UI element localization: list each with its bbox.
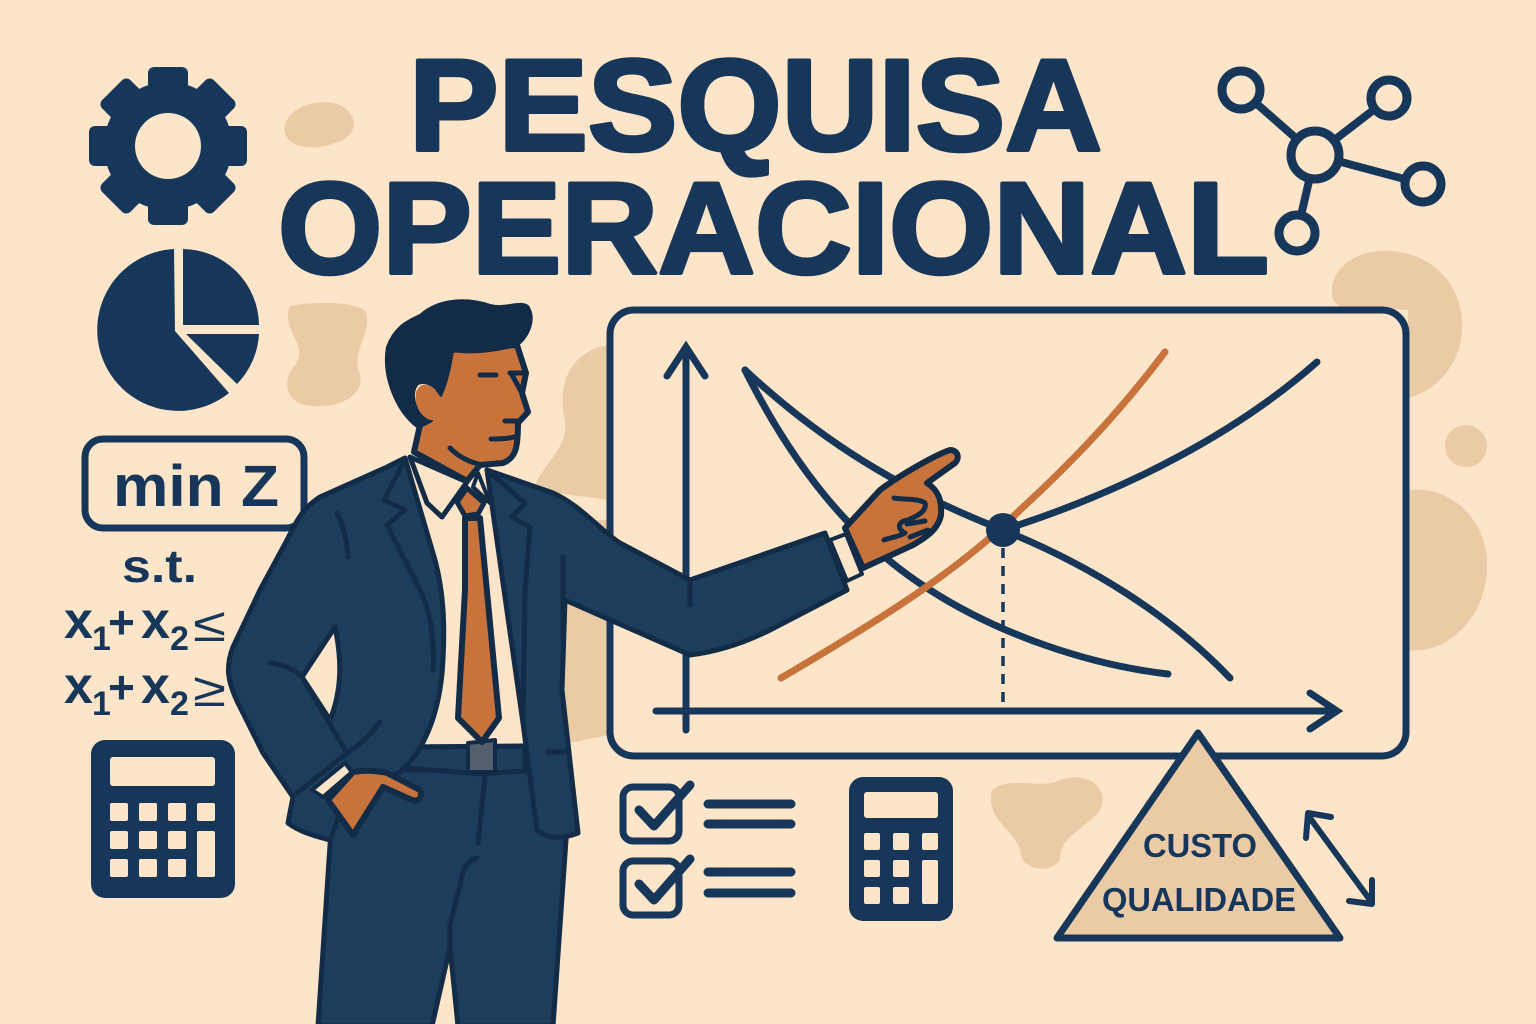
jacket right and arm — [487, 470, 847, 837]
shirt cuff arm — [830, 534, 862, 581]
constraints: s.t. — [122, 540, 197, 592]
facial lines — [450, 373, 524, 465]
right collar — [473, 473, 490, 503]
constraints: 1 — [92, 685, 111, 723]
equilibrium point — [986, 513, 1020, 547]
constraints: x — [141, 592, 170, 650]
formula box: min Z: min Z — [113, 454, 279, 519]
jacket left — [228, 458, 444, 840]
constraints: + — [108, 596, 135, 648]
demand curve — [745, 370, 1168, 674]
hand in pocket — [328, 771, 421, 835]
title: OPERACIONAL — [278, 155, 1269, 301]
constraints: ≤ — [193, 599, 226, 652]
constraints: 2 — [170, 620, 189, 658]
triangle: custo / qualidade — [1057, 733, 1340, 938]
finger lines — [884, 498, 928, 540]
triangle: custo / qualidade: CUSTO — [1143, 827, 1257, 864]
background blobs — [285, 102, 1487, 869]
arm gap — [302, 627, 340, 720]
tie — [458, 518, 499, 742]
x axis arrow — [656, 693, 1337, 729]
formula box: min Z — [85, 439, 304, 528]
pointing hand — [845, 450, 958, 568]
second curve — [745, 370, 1230, 678]
chart panel — [610, 310, 1406, 756]
dashed guide — [1001, 548, 1005, 708]
triangle: custo / qualidade: QUALIDADE — [1102, 881, 1296, 918]
jacket lines — [270, 460, 690, 793]
title — [278, 32, 1269, 301]
hair — [386, 300, 532, 427]
icon: network — [1222, 71, 1441, 251]
constraints: x — [64, 657, 93, 715]
constraints: x — [64, 592, 93, 650]
icon: pie chart — [97, 249, 259, 411]
belt buckle — [468, 740, 495, 772]
ear — [416, 385, 441, 420]
left collar — [410, 457, 467, 517]
neck and face — [414, 345, 528, 481]
orange curve — [781, 352, 1165, 678]
shirt cuff hand — [312, 763, 352, 797]
icon: calculator centre — [849, 777, 953, 921]
icon: double arrow — [1306, 813, 1372, 904]
constraints: + — [108, 661, 135, 713]
tie knot — [457, 488, 484, 516]
rising curve — [1003, 362, 1317, 530]
constraints: x — [141, 657, 170, 715]
constraints: 2 — [170, 685, 189, 723]
trousers — [318, 770, 566, 1024]
shirt — [405, 457, 525, 748]
constraints: ≥ — [193, 664, 226, 717]
constraints — [64, 540, 226, 723]
icon: calculator left — [91, 740, 235, 898]
belt — [396, 746, 525, 774]
y axis arrow — [667, 347, 705, 730]
title: PESQUISA — [409, 32, 1102, 178]
presenter — [228, 300, 958, 1024]
checklist — [623, 785, 791, 915]
constraints: 1 — [92, 620, 111, 658]
icon: gear — [89, 67, 247, 225]
